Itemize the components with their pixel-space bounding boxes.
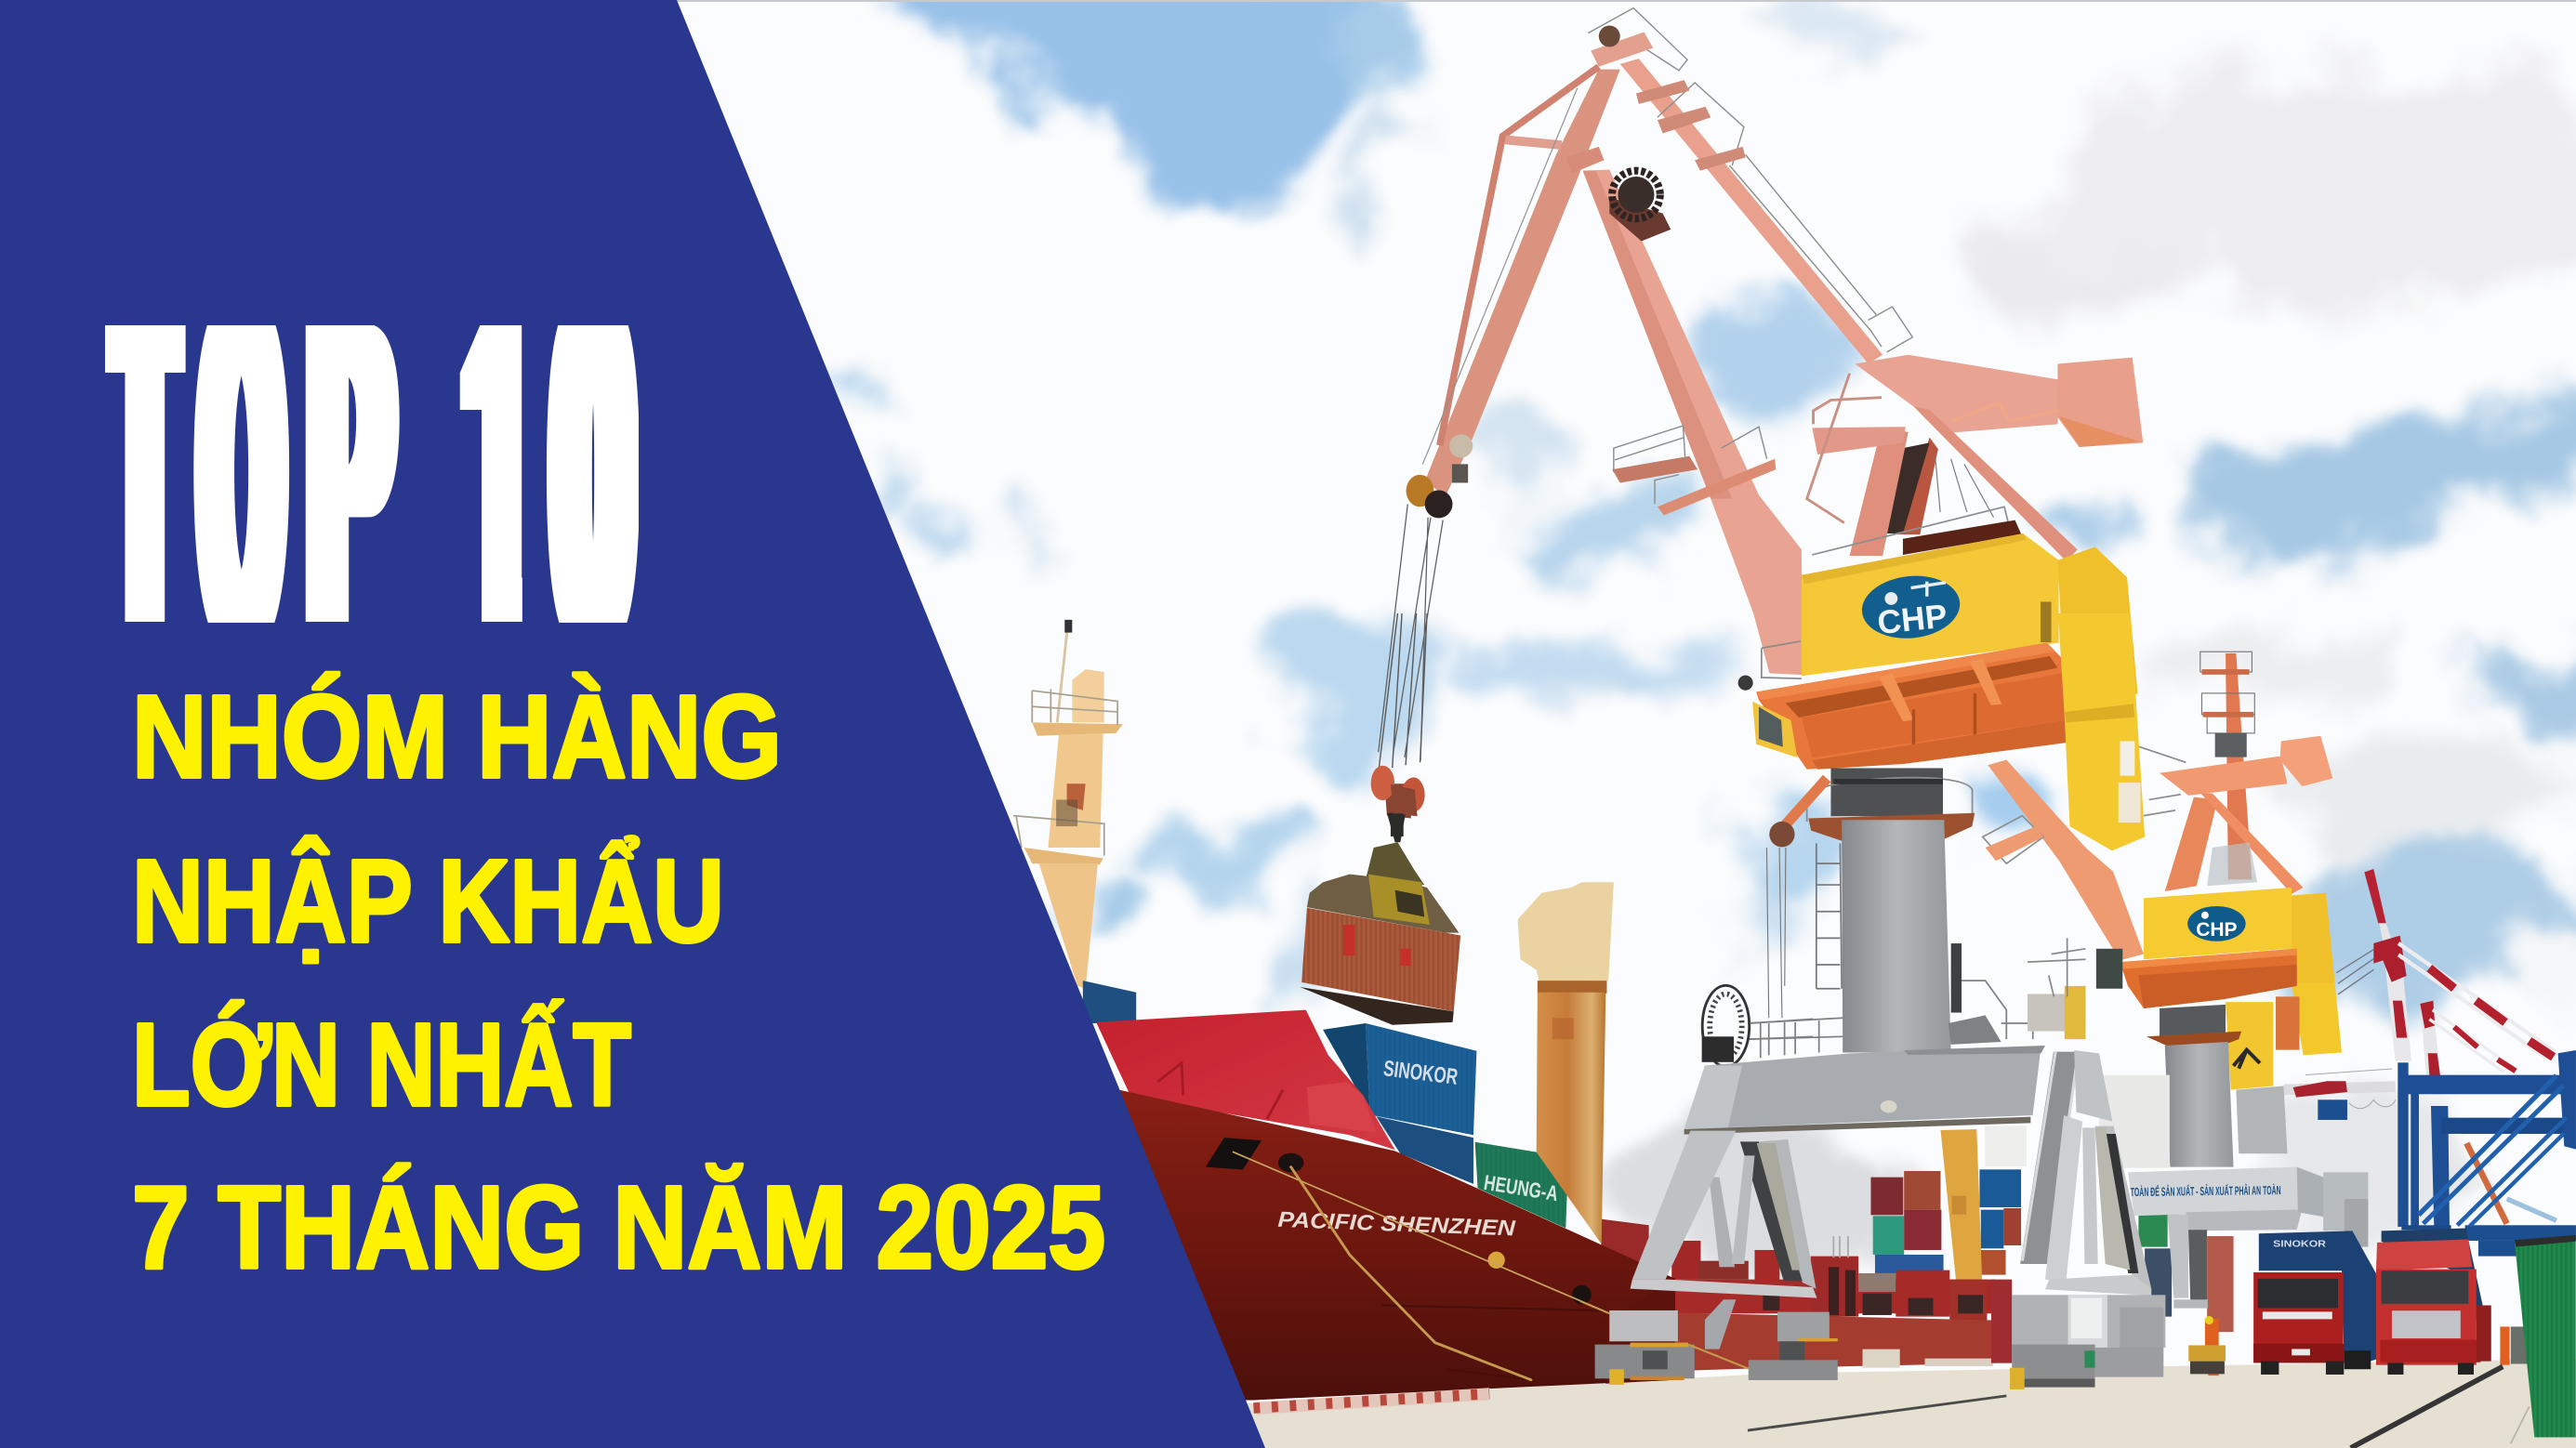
A-frame support	[1897, 438, 1938, 534]
column ladder	[1816, 843, 1842, 989]
blue title panel	[0, 0, 1265, 1448]
container truck left	[2253, 1231, 2379, 1375]
hook upper part	[1371, 769, 1394, 800]
portal left legs	[1631, 1131, 1816, 1349]
grey tower column	[1842, 820, 1951, 1052]
counterweight arm	[1855, 355, 2060, 433]
heading line 1: NHÓM HÀNG	[132, 671, 782, 802]
cargo ship Pacific Shenzhen	[1013, 620, 1675, 1415]
heading line 4: 7 THÁNG NĂM 2025	[132, 1162, 1105, 1293]
slewing ring	[1808, 813, 1975, 841]
cable drum	[1609, 171, 1671, 241]
ship superstructure	[1096, 1010, 1395, 1150]
red and white boom	[2364, 869, 2555, 1075]
boom platforms	[1612, 456, 1698, 482]
slewing collar	[1830, 769, 1943, 816]
main gantry portal	[1580, 1046, 2208, 1389]
orange deck	[1756, 643, 2067, 770]
main port crane upper structure	[1371, 8, 2143, 836]
deck railing	[1748, 981, 2086, 1055]
company logo large	[1859, 572, 1963, 643]
left bogie	[1595, 1310, 1838, 1385]
quay ground	[1246, 1359, 2576, 1448]
right bogie with cabin	[2010, 1295, 2165, 1389]
second crane gantry beam with slogan	[2128, 1167, 2368, 1332]
sky with clouds	[651, 0, 2576, 1448]
second gantry legs	[2168, 1215, 2208, 1309]
trucks and quay details	[1748, 1228, 2576, 1448]
title: TOP 10	[105, 325, 639, 623]
company logo large: CHP	[1876, 598, 1949, 641]
containers, post and ship deck behind gantry	[1580, 1075, 2172, 1374]
portal right legs and stair	[1991, 1050, 2151, 1363]
orange bollard	[2500, 1326, 2510, 1365]
heading line 3: LỚN NHẤT	[132, 999, 631, 1130]
blue gantry crane in background	[2284, 869, 2576, 1257]
shore boom	[2284, 1069, 2396, 1120]
ship name: PACIFIC SHENZHEN	[1277, 1207, 1517, 1241]
deck crane post	[1518, 882, 1614, 1244]
second crane gantry beam with slogan: TOÀN ĐỂ SẢN XUẤT - SẢN XUẤT PHẢI AN TOÀN	[2131, 1183, 2281, 1199]
small sheave arm	[1766, 779, 1827, 1018]
rail tracks	[2351, 1366, 2503, 1448]
company logo	[2187, 906, 2246, 941]
dock edge fender	[1253, 1388, 1489, 1415]
hoist cables	[1379, 504, 1443, 760]
blue frame	[2398, 1050, 2576, 1257]
mooring ropes	[1234, 1152, 1605, 1380]
ship mast	[1013, 620, 1123, 989]
sheave and jib tip	[1407, 475, 1433, 507]
containers on deck: SINOKOR	[1382, 1056, 1460, 1090]
machine house	[1802, 533, 2059, 676]
container truck right	[2376, 1228, 2491, 1375]
yellow side column	[2058, 613, 2145, 850]
worker and cart	[2188, 1316, 2226, 1376]
jib head	[1591, 32, 1653, 67]
subtitle: yellow heading	[132, 671, 1105, 1293]
second port crane in background	[1983, 652, 2342, 1167]
grab and suspended container	[1300, 613, 1460, 1025]
portal beam	[1684, 1047, 2041, 1129]
company logo: CHP	[2196, 919, 2238, 941]
containers on deck: HEUNG-A	[1483, 1170, 1560, 1205]
containers on deck	[1323, 1023, 1568, 1228]
rear luffing link	[1620, 59, 1882, 363]
green container foreground	[2515, 1235, 2576, 1438]
main port crane lower structure	[1748, 613, 2368, 1332]
ship deck machinery	[1663, 1236, 1995, 1322]
operator cabin	[1752, 702, 1797, 757]
main boom	[1583, 170, 1803, 675]
container truck left: SINOKOR	[2273, 1239, 2327, 1250]
ship hull	[1083, 1082, 1675, 1400]
heading line 2: NHẬP KHẨU	[132, 836, 724, 967]
front jib arm	[1425, 70, 1620, 497]
rope drum on gantry	[1702, 985, 1813, 1066]
